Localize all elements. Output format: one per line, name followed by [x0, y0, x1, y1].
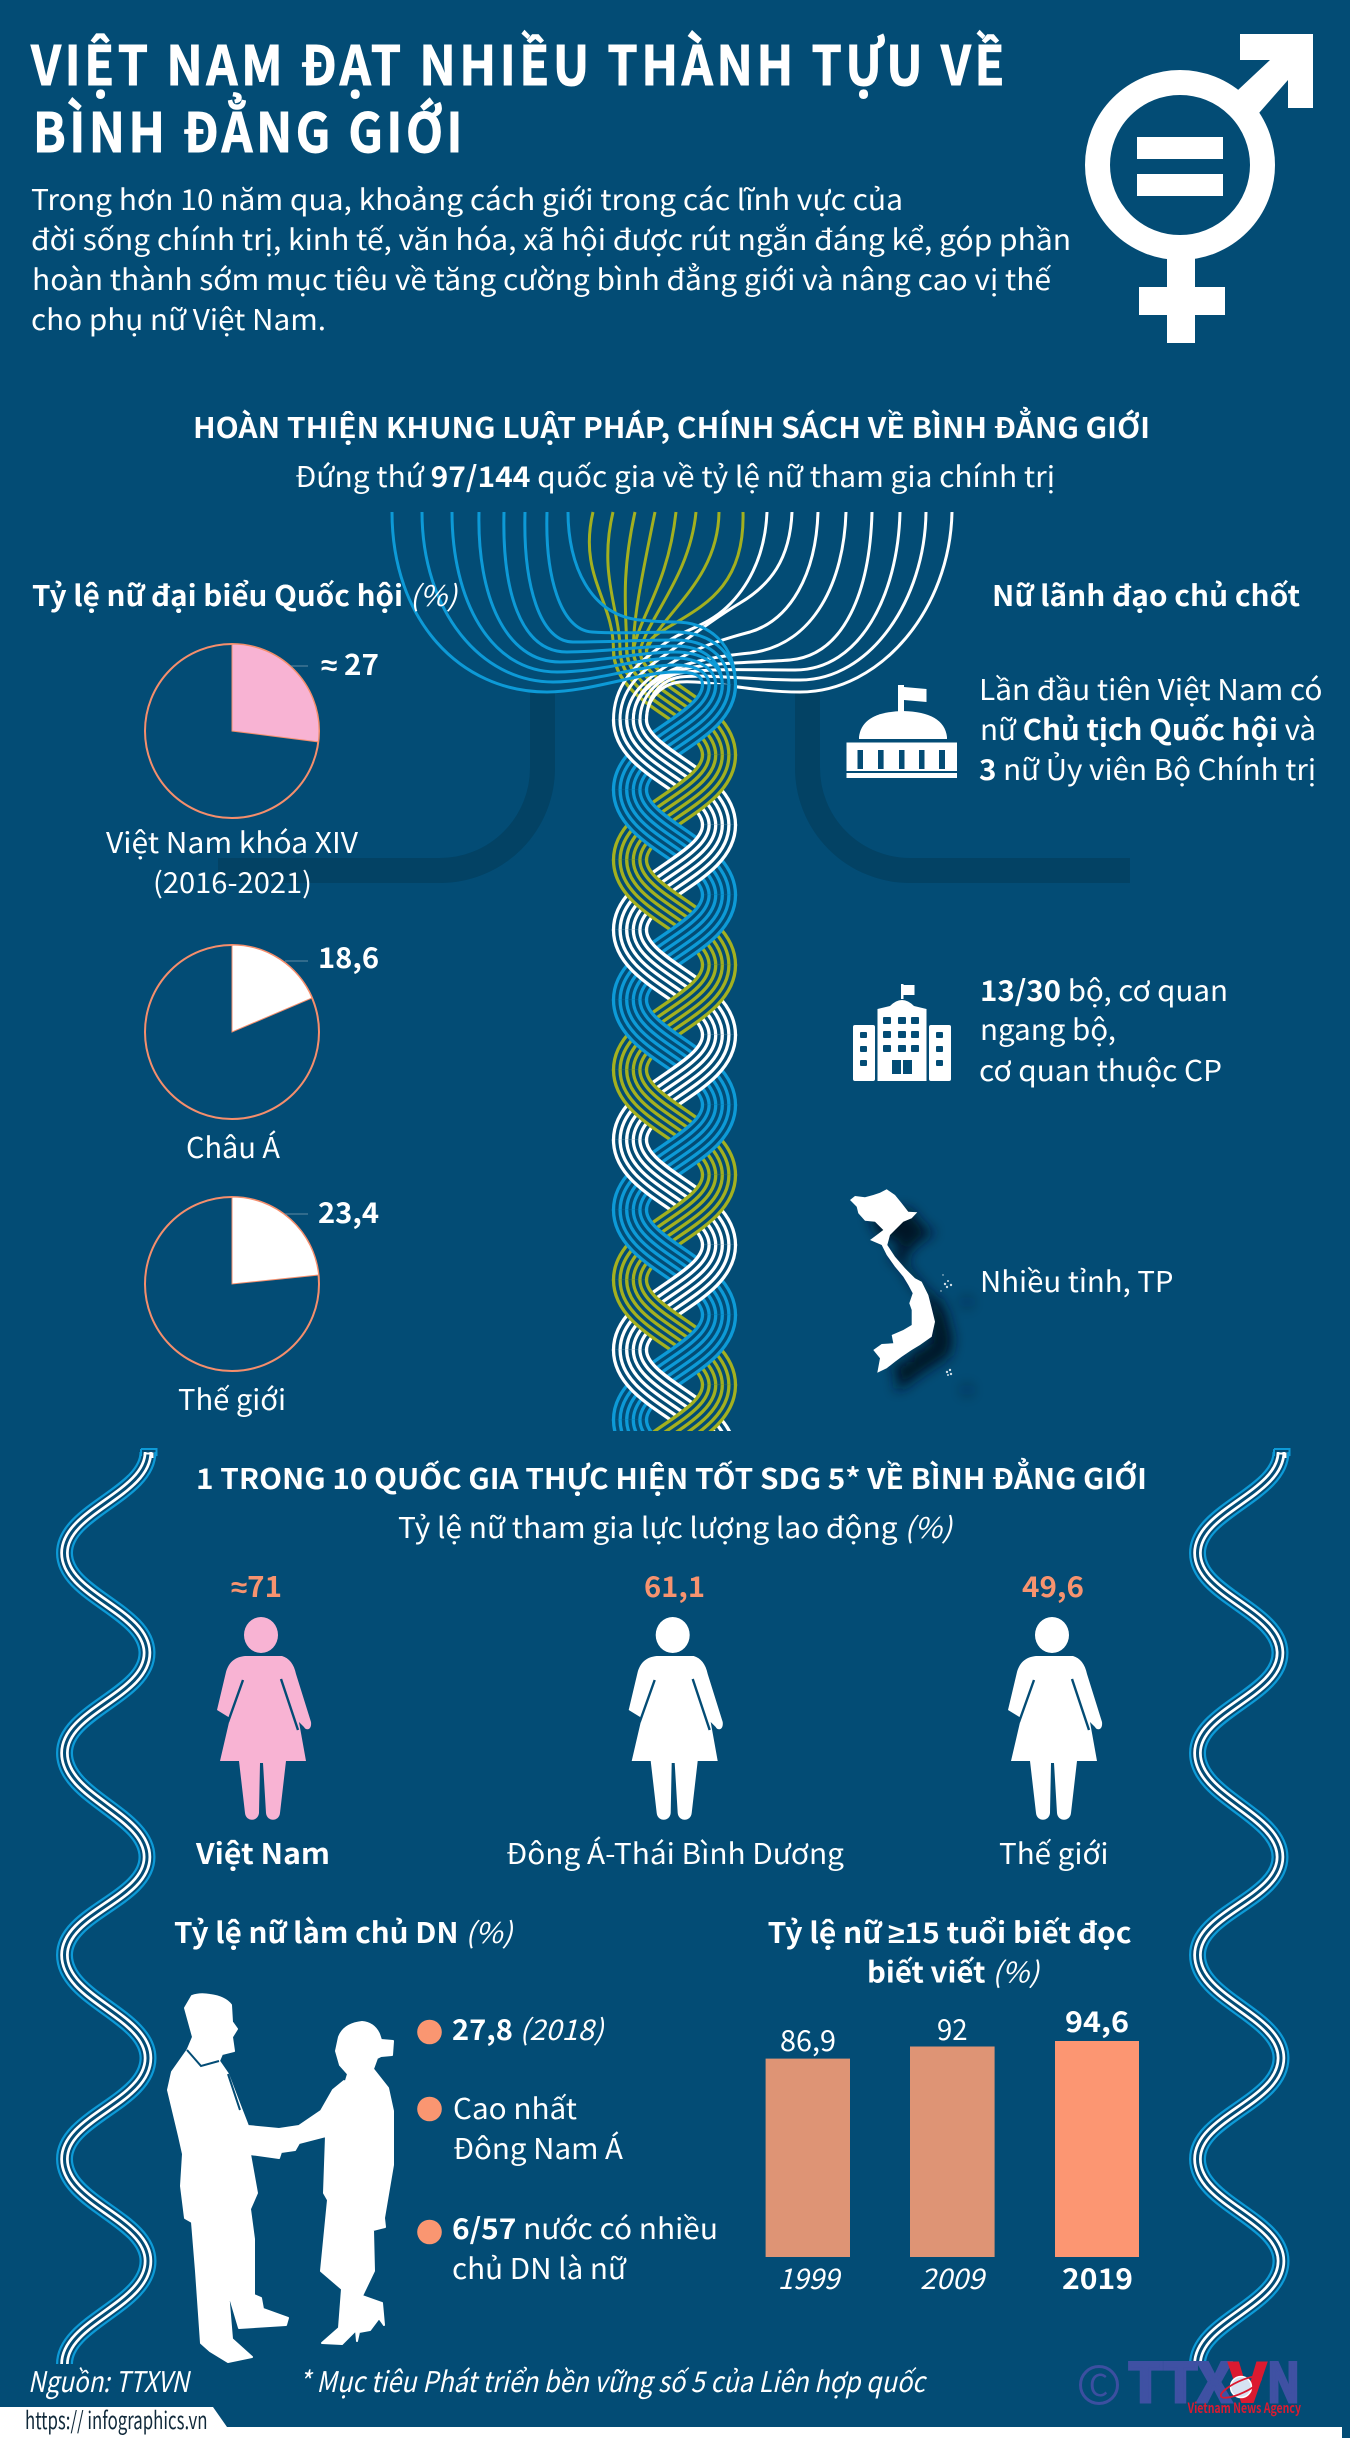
icon: gender equality symbol — [1098, 34, 1313, 343]
blue fan lines — [392, 512, 736, 692]
text 27,8: 27,8 (2018) — [452, 2008, 605, 2049]
year 2009: 2009 — [920, 2257, 987, 2298]
text: ministries: cơ quan thuộc CP — [979, 1049, 1222, 1090]
section subheading: political rank: Đứng thứ 97/144 quốc gia về tỷ lệ nữ tham gia chính trị — [295, 455, 1055, 496]
intro paragraph — [31, 178, 1071, 339]
figure: Vietnam — [195, 1565, 330, 1873]
logo: TTXVN: C — [1089, 2361, 1108, 2405]
value 2019: 94,6 — [1065, 2000, 1129, 2041]
pie label: World: Thế giới — [178, 1378, 286, 1419]
pie label: Vietnam: (2016-2021) — [153, 861, 312, 902]
logo: TTXVN: TTX — [1128, 2342, 1232, 2418]
logo: TTXVN: V — [1228, 2342, 1267, 2418]
intro paragraph: cho phụ nữ Việt Nam. — [31, 298, 326, 339]
year 2019: 2019 — [1062, 2257, 1133, 2298]
value 1999: 86,9 — [780, 2019, 836, 2060]
figure: East Asia Pacific — [506, 1565, 844, 1873]
title — [30, 22, 1008, 168]
footer bar: https:// infographics.vn — [25, 2401, 208, 2436]
source: Nguồn: TTXVN — [28, 2360, 191, 2401]
heading: literacy: Tỷ lệ nữ ≥15 tuổi biết đọc — [768, 1911, 1132, 1952]
value: approx 27: ≈ 27 — [321, 643, 379, 684]
heading: female business owners: Tỷ lệ nữ làm chủ DN (%) — [174, 1911, 514, 1952]
text: first female NA chair — [979, 668, 1322, 789]
decorative rail right — [808, 690, 1130, 870]
text owners: chủ DN là nữ — [452, 2247, 627, 2288]
intro paragraph: đời sống chính trị, kinh tế, văn hóa, xã hội được rút ngắn đáng kể, góp phần — [31, 218, 1071, 259]
text highest: Cao nhất — [453, 2087, 577, 2128]
text: first female NA chair: nữ Chủ tịch Quốc hội và — [980, 708, 1316, 749]
value: 23,4: 23,4 — [318, 1191, 379, 1232]
label: Việt Nam — [195, 1832, 330, 1873]
label: Đông Á-Thái Bình Dương — [506, 1832, 844, 1873]
heading: female deputies: Tỷ lệ nữ đại biểu Quốc hội (%) — [32, 574, 458, 615]
pie label: Vietnam — [106, 821, 359, 902]
value: 61,1: 61,1 — [644, 1565, 705, 1606]
pie chart: Asia 18.6 — [145, 936, 379, 1119]
bar 2009 — [910, 2046, 995, 2257]
bullet list: female business owners — [417, 2008, 718, 2288]
bar 2019 — [1055, 2041, 1139, 2257]
text 6/57: 6/57 nước có nhiều — [452, 2207, 718, 2248]
bullet highest — [417, 2097, 442, 2121]
icon: national assembly — [846, 685, 957, 778]
pie label: Asia: Châu Á — [186, 1126, 281, 1167]
intro paragraph: Trong hơn 10 năm qua, khoảng cách giới trong các lĩnh vực của — [31, 178, 903, 219]
woven segments — [630, 684, 719, 791]
title: BÌNH ĐẲNG GIỚI — [33, 89, 466, 168]
section subheading: labour force: Tỷ lệ nữ tham gia lực lượng lao động (%) — [398, 1506, 953, 1547]
logo: TTXVN: N — [1267, 2342, 1300, 2418]
text southeast asia: Đông Nam Á — [453, 2127, 624, 2168]
heading: literacy: biết viết (%) — [867, 1950, 1040, 1992]
value: approx 71: ≈71 — [231, 1565, 282, 1606]
bullet 27,8 — [417, 2020, 442, 2044]
value: 18,6: 18,6 — [318, 936, 379, 977]
woman icon pink — [217, 1617, 311, 1820]
section heading: SDG 5: 1 TRONG 10 QUỐC GIA THỰC HIỆN TỐT SDG 5* VỀ BÌNH ĐẲNG GIỚI — [196, 1457, 1147, 1498]
woman icon white — [629, 1617, 723, 1820]
intro paragraph: hoàn thành sớm mục tiêu về tăng cường bình đẳng giới và nâng cao vị thế — [32, 258, 1051, 299]
text: ministries: 13/30 bộ, cơ quan — [980, 969, 1228, 1010]
pie chart: World 23.4 — [145, 1191, 379, 1371]
decorative rail left — [218, 690, 542, 870]
section heading: legal framework: HOÀN THIỆN KHUNG LUẬT PHÁP, CHÍNH SÁCH VỀ BÌNH ĐẲNG GIỚI — [193, 406, 1150, 447]
woman icon white — [1008, 1617, 1102, 1820]
text: ministries: ngang bộ, — [980, 1008, 1116, 1049]
label: Thế giới — [999, 1832, 1108, 1873]
bar 1999 — [766, 2059, 850, 2257]
olive fan lines — [589, 512, 743, 650]
heading: literacy — [768, 1911, 1132, 1992]
bullet 6/57 — [417, 2220, 442, 2244]
footnote: * Mục tiêu Phát triển bền vững số 5 của Liên hợp quốc — [299, 2360, 927, 2401]
logo: TTXVN — [1080, 2342, 1301, 2418]
bar chart: literacy — [766, 2000, 1139, 2298]
text: many provinces: Nhiều tỉnh, TP — [980, 1260, 1174, 1301]
olive entry strand — [630, 649, 719, 756]
text: first female NA chair: Lần đầu tiên Việt Nam có — [979, 668, 1322, 709]
icon: ministry building — [853, 984, 951, 1081]
heading: key female leaders: Nữ lãnh đạo chủ chốt — [992, 574, 1300, 615]
text: first female NA chair: 3 nữ Ủy viên Bộ Chính trị — [979, 748, 1316, 789]
value: 49,6: 49,6 — [1022, 1565, 1084, 1606]
white fan lines — [614, 512, 952, 720]
footer bar — [0, 2401, 1342, 2438]
decorative wave left — [64, 1449, 156, 2364]
title: VIỆT NAM ĐẠT NHIỀU THÀNH TỰU VỀ — [30, 22, 1008, 101]
pie label: Vietnam: Việt Nam khóa XIV — [106, 821, 359, 862]
text: ministries — [979, 969, 1228, 1090]
decorative wave right — [1198, 1449, 1290, 2364]
icon: map of Vietnam — [850, 1189, 973, 1396]
logo: TTXVN: Vietnam News Agency — [1187, 2398, 1301, 2418]
pie chart: Vietnam 27 — [145, 643, 379, 818]
braid: woven strands of blue, olive and white — [392, 512, 952, 1526]
year 1999: 1999 — [778, 2257, 842, 2298]
value 2009: 92 — [937, 2008, 968, 2049]
icon: handshake silhouette — [168, 1994, 393, 2362]
figure: World — [999, 1565, 1108, 1873]
